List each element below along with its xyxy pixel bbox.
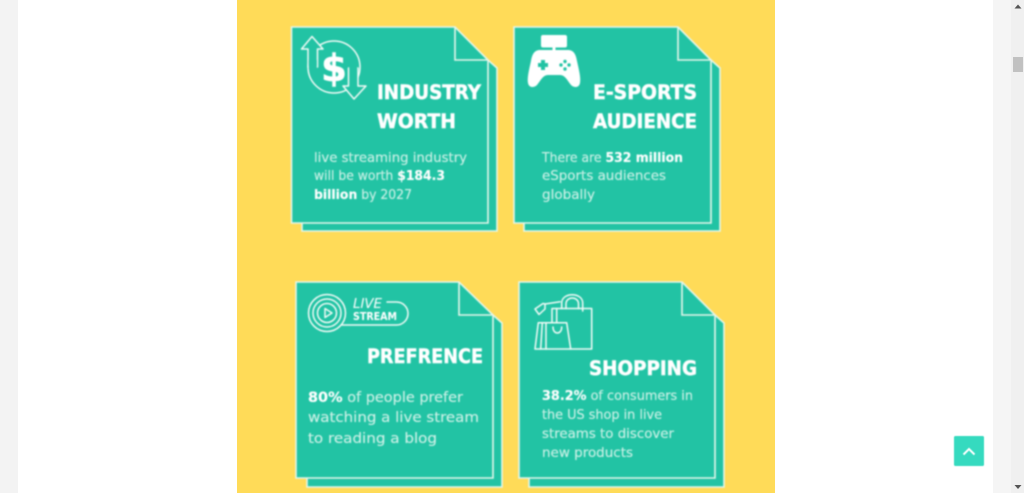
body text: to reading a blog <box>308 431 437 447</box>
body text: globally <box>542 187 595 203</box>
page fold <box>678 27 711 60</box>
icon: live stream <box>308 294 408 332</box>
body text <box>308 390 479 447</box>
back sheet <box>302 60 497 231</box>
body text: new products <box>542 445 633 461</box>
heading: AUDIENCE <box>593 110 697 133</box>
body text: will be worth $184.3 <box>314 168 445 184</box>
front sheet <box>292 27 488 223</box>
front sheet <box>519 282 715 478</box>
panel: preference <box>296 282 502 487</box>
heading: PREFRENCE <box>367 345 483 368</box>
icon: dollar with arrows <box>302 36 366 99</box>
body text: eSports audiences <box>542 168 666 184</box>
front sheet <box>514 27 711 223</box>
back to top button <box>954 436 984 466</box>
icon: live stream: LIVE <box>353 297 383 312</box>
back sheet <box>529 315 724 487</box>
body text: 80% of people prefer <box>308 390 463 406</box>
heading: INDUSTRY <box>377 81 482 104</box>
icon: shopping bags <box>535 295 592 349</box>
left page gutter <box>0 0 18 493</box>
page fold <box>455 27 488 60</box>
heading: SHOPPING <box>589 357 697 380</box>
body text: watching a live stream <box>308 410 479 426</box>
body text: the US shop in live <box>542 407 662 423</box>
yellow infographic background <box>237 0 775 493</box>
panel: shopping <box>519 282 724 487</box>
heading: WORTH <box>377 110 456 133</box>
back sheet <box>524 60 720 231</box>
body text: streams to discover <box>542 426 674 442</box>
body text: billion by 2027 <box>314 187 412 203</box>
front sheet <box>296 282 493 478</box>
panel: e-sports audience <box>514 27 720 231</box>
body text <box>542 388 693 461</box>
icon: live stream: STREAM <box>353 310 397 323</box>
body text: live streaming industry <box>314 150 467 166</box>
page fold <box>682 282 715 315</box>
body text: 38.2% of consumers in <box>542 388 693 404</box>
body text <box>314 150 467 203</box>
panel: industry worth <box>292 27 497 231</box>
icon: game controller <box>528 35 580 87</box>
scrollbar <box>1011 0 1024 493</box>
page fold <box>459 282 493 315</box>
right page gutter <box>993 0 1011 493</box>
body text: There are 532 million <box>541 150 683 166</box>
heading: E-SPORTS <box>593 81 697 104</box>
body text <box>541 150 683 203</box>
back sheet <box>307 315 502 487</box>
icon: dollar with arrows: $ <box>321 47 347 90</box>
